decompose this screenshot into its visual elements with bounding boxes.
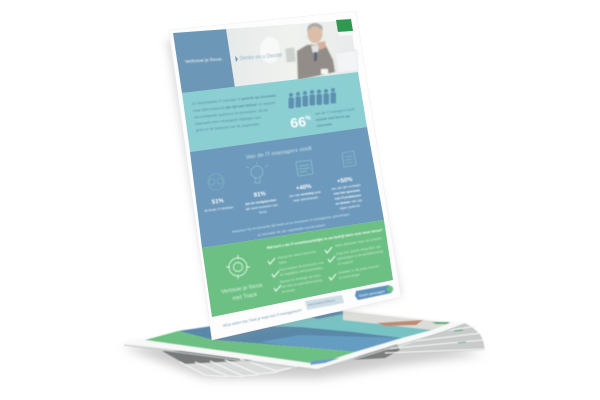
checklist: taken bbox=[279, 260, 287, 265]
stat: 51%: 51% bbox=[211, 198, 225, 206]
stat: +50% bbox=[331, 177, 363, 210]
icon: gears bbox=[208, 174, 224, 190]
stat: +50%: +50% bbox=[337, 177, 354, 185]
panel: green bbox=[202, 220, 393, 317]
right fan bbox=[375, 323, 485, 356]
checklist: Bepaal uw strategie op basis bbox=[280, 273, 321, 284]
checklist: oplossingen in de bedrijfsvoering bbox=[337, 249, 384, 261]
sheet: teal band bbox=[262, 312, 432, 338]
stat: 51% bbox=[204, 198, 234, 213]
header notch bbox=[235, 56, 238, 62]
stat: 66% caption bbox=[315, 107, 355, 128]
icon: screen bbox=[296, 160, 313, 176]
upright brochure bbox=[169, 11, 401, 340]
paragraph: blue section footer: Waardoor hij onvoldoende tijd heeft om te investeren in strategische oplossingen bbox=[232, 212, 350, 234]
panel: teal bbox=[182, 72, 367, 152]
icon: target bbox=[226, 255, 250, 279]
heading: statistics: Van de IT-managers vindt bbox=[245, 146, 312, 161]
stat: 81%: dat de eindgebruiker bbox=[245, 198, 278, 206]
stat: +50%: en beheer van zijn bbox=[335, 198, 363, 206]
stat: 66% caption: van de IT-managers heeft bbox=[315, 107, 355, 116]
paper bbox=[169, 11, 401, 340]
stat: 66% caption: innovatie bbox=[317, 122, 332, 128]
stat: 51%: de beste IT-strategie bbox=[204, 205, 234, 213]
stat: +50%: van zijn tijd verdwijnt bbox=[331, 183, 361, 191]
icon: document bbox=[342, 151, 356, 167]
panel: header blue bbox=[173, 29, 237, 93]
checklist: de dagelijkse werkzaamheden bbox=[280, 266, 323, 277]
checklist: Automatiseer de processen van bbox=[279, 260, 324, 272]
box: contact bbox=[305, 295, 344, 310]
checklist: en trends bbox=[282, 288, 296, 294]
stat: 81% bbox=[245, 191, 278, 215]
heading: left: Vertrouw je focus. bbox=[184, 56, 223, 65]
text: green heading bbox=[221, 283, 263, 302]
stat: 81%: 81% bbox=[253, 191, 267, 199]
stat: +50%: met het oplossen bbox=[333, 188, 360, 196]
checklist: Bepaal de meest relevante bbox=[278, 250, 316, 260]
intro text: De Nederlandse IT-manager is gericht op innovatie, bbox=[192, 94, 277, 106]
intro text bbox=[192, 94, 277, 132]
text: benefits heading: Wat kunt u als IT-verantwoordelijke in uw bedrijf doen voor meer focus? bbox=[267, 228, 383, 250]
text: green heading: met Track bbox=[232, 292, 258, 302]
stat: +40% bbox=[289, 184, 321, 203]
sheet: green band bbox=[145, 331, 355, 364]
box: contact: www.track.nl/focus bbox=[308, 298, 336, 307]
button: download: Gratis aanvragen bbox=[359, 289, 385, 298]
checklist: Investeer in de juiste mensen bbox=[338, 264, 380, 275]
panel: header photo bbox=[226, 20, 358, 88]
stack of brochures bbox=[123, 309, 485, 378]
left fan bbox=[162, 351, 300, 378]
sheet: dark blue band bbox=[178, 311, 402, 347]
checklist bbox=[268, 236, 384, 294]
stat: +40%: naar administratie bbox=[293, 195, 319, 203]
top sheet of stack bbox=[123, 309, 465, 370]
paragraph: blue section footer: en innovatie die zijn organisatie vooruit helpen. bbox=[257, 223, 326, 237]
button: download bbox=[355, 285, 393, 300]
checklist: Werk efficiënter door uw systeem bbox=[335, 236, 382, 248]
stat: +50%: eigen systeem bbox=[339, 204, 361, 210]
text: green heading: Vertouw je focus bbox=[221, 283, 263, 295]
sheet: photo band bbox=[343, 311, 450, 330]
stat: 66%: 66 bbox=[289, 113, 307, 131]
stat: +50%: van IT-problemen bbox=[334, 193, 361, 201]
stat: 81%: focus bbox=[259, 209, 267, 215]
checklist: Zorg voor goede integraties van bbox=[336, 244, 381, 256]
icon: light bulb bbox=[246, 162, 268, 183]
sheet: light blue band bbox=[260, 335, 402, 352]
photo: man bbox=[260, 23, 358, 80]
footer text: Wil je weten hoe Track je helpt met IT-management? bbox=[223, 308, 302, 328]
logo bbox=[336, 19, 353, 32]
stat: 66%: % bbox=[305, 115, 312, 122]
intro text: maar 66% besteedt zijn tijd aan beheer en support bbox=[193, 101, 275, 113]
stat: +40%: van zijn werkdag gaat bbox=[289, 190, 321, 198]
stat: +40%: +40% bbox=[296, 184, 313, 192]
ground shadow bbox=[122, 345, 485, 378]
panel: blue statistics bbox=[190, 127, 384, 248]
heading: right: Denke en u Decidé bbox=[239, 53, 283, 62]
upright paper shadow bbox=[166, 22, 402, 342]
intro text: van bestaande systemen en processen. Hij wil bbox=[194, 108, 268, 119]
checklist: van data en gebruikservaring bbox=[281, 278, 322, 289]
checklist: en support bbox=[338, 259, 353, 266]
intro text: daarnaast meer strategisch bijdragen aan bbox=[195, 115, 261, 126]
fanned lower sheets bbox=[162, 323, 485, 378]
icon: seven people bbox=[288, 88, 336, 108]
stat: 66% caption: moeite met focus op bbox=[316, 114, 350, 122]
stat: 81%: tijd moet besteden aan bbox=[245, 203, 278, 211]
checklist: en technologie bbox=[339, 272, 360, 280]
intro text: groei en de business van de organisatie. bbox=[196, 122, 260, 132]
